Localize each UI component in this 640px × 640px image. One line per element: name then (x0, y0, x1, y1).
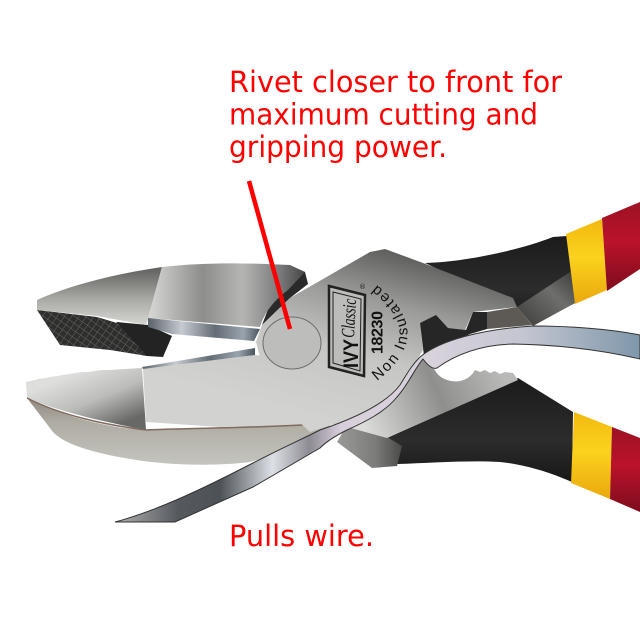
lower inner jaw with wire notch (347, 359, 518, 438)
wire (115, 326, 640, 522)
upper jaw (37, 263, 308, 357)
rivet (263, 317, 321, 369)
upper jaw dark inner block (100, 322, 172, 357)
upper jaw brushed facet (148, 263, 305, 327)
bottom handle red grip (610, 427, 640, 512)
pointer line to rivet (249, 181, 290, 329)
pliers head (256, 249, 532, 432)
lower jaw bottom bevel (27, 398, 330, 465)
logo Classic script: Classic (338, 298, 361, 338)
head wire recess (420, 312, 487, 356)
lower pivot block (337, 425, 402, 468)
callout: rivet (229, 65, 562, 164)
upper jaw tip facet (37, 267, 162, 325)
lower jaw tip facet (26, 368, 146, 430)
logo inner frame (333, 292, 361, 371)
callout: rivet: gripping power. (229, 130, 447, 164)
lower jaw cutting edge (142, 348, 255, 369)
upper jaw cutting edge (148, 318, 260, 341)
model number: 18230 (370, 311, 386, 354)
bevel seam (27, 398, 320, 430)
bottom handle (387, 378, 640, 512)
callout: rivet: maximum cutting and (229, 98, 538, 132)
bottom handle black grip (387, 378, 573, 482)
logo frame (329, 286, 365, 376)
bottom handle yellow band (571, 412, 612, 499)
callout: pulls wire: Pulls wire. (229, 519, 374, 553)
logo box (329, 286, 365, 376)
non insulated curved text: Non Insulated (370, 286, 408, 380)
registered mark: ® (359, 283, 366, 291)
lower jaw (26, 348, 345, 465)
top handle red grip (602, 202, 640, 291)
lower jaw main facet (143, 355, 345, 427)
callout: rivet: Rivet closer to front for (229, 65, 562, 99)
top handle (425, 202, 640, 326)
head plate (256, 249, 517, 432)
head jaw teeth (487, 307, 532, 329)
upper jaw rear dark shoulder (262, 265, 308, 325)
top handle yellow band (566, 219, 607, 304)
upper jaw knurled gripping face (37, 310, 147, 356)
logo IVY mark: IVY (340, 339, 363, 368)
top handle black grip (425, 236, 575, 325)
top handle metal edge (517, 270, 575, 326)
